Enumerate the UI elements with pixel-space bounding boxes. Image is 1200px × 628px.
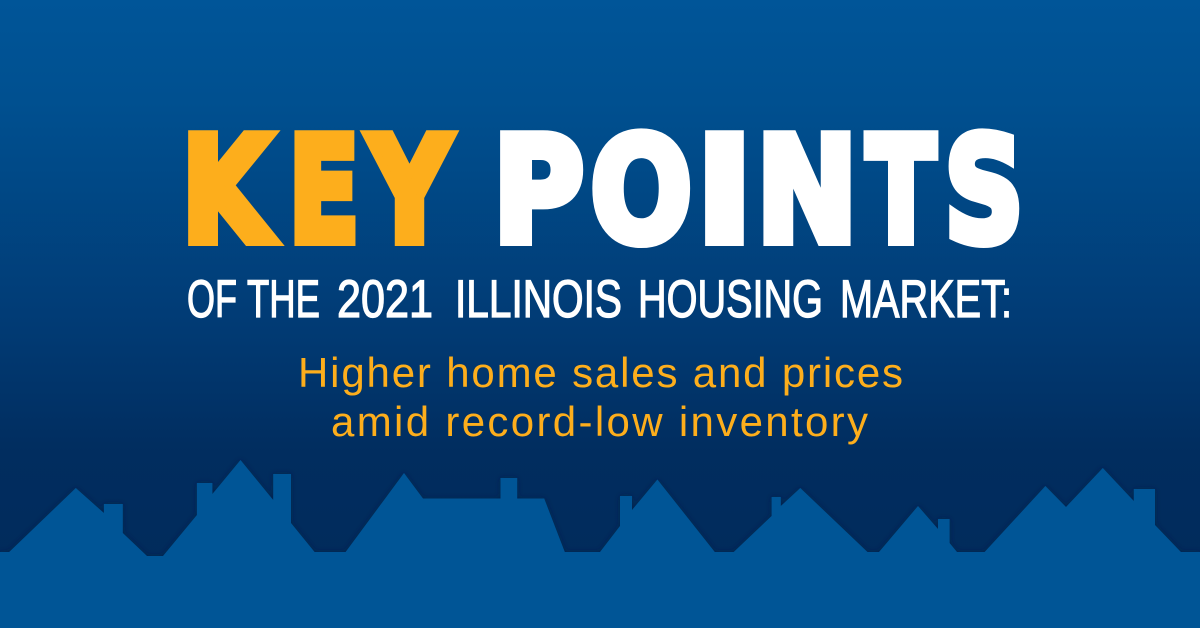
word: KEY (182, 107, 453, 276)
word: POINTS: N (756, 107, 858, 276)
house skyline silhouette (0, 460, 1200, 628)
subtitle line: of the 2021 Illinois housing market: OF (187, 270, 237, 329)
subtitle line: of the 2021 Illinois housing market: 2021 (337, 270, 433, 329)
word: POINTS: O (590, 107, 692, 276)
subtitle line: of the 2021 Illinois housing market: THE (247, 270, 320, 329)
word: POINTS: I (696, 107, 752, 276)
word: POINTS (493, 107, 1024, 276)
tagline (298, 349, 903, 445)
word: KEY: Y (366, 107, 453, 276)
word: KEY: E (288, 107, 360, 276)
tagline: amid record-low inventory (331, 398, 868, 445)
word: POINTS: T (866, 107, 936, 276)
word: POINTS: S (944, 107, 1024, 276)
word: POINTS: P (493, 107, 584, 276)
subtitle line: of the 2021 Illinois housing market: HOUSING (638, 270, 823, 329)
subtitle line: of the 2021 Illinois housing market: ILLINOIS (455, 270, 622, 329)
tagline: Higher home sales and prices (298, 349, 903, 396)
subtitle line: of the 2021 Illinois housing market: MARKET: (840, 270, 1012, 329)
title: KEY POINTS (182, 107, 1024, 276)
subtitle line: of the 2021 Illinois housing market (187, 270, 1012, 329)
word: KEY: K (182, 107, 275, 276)
